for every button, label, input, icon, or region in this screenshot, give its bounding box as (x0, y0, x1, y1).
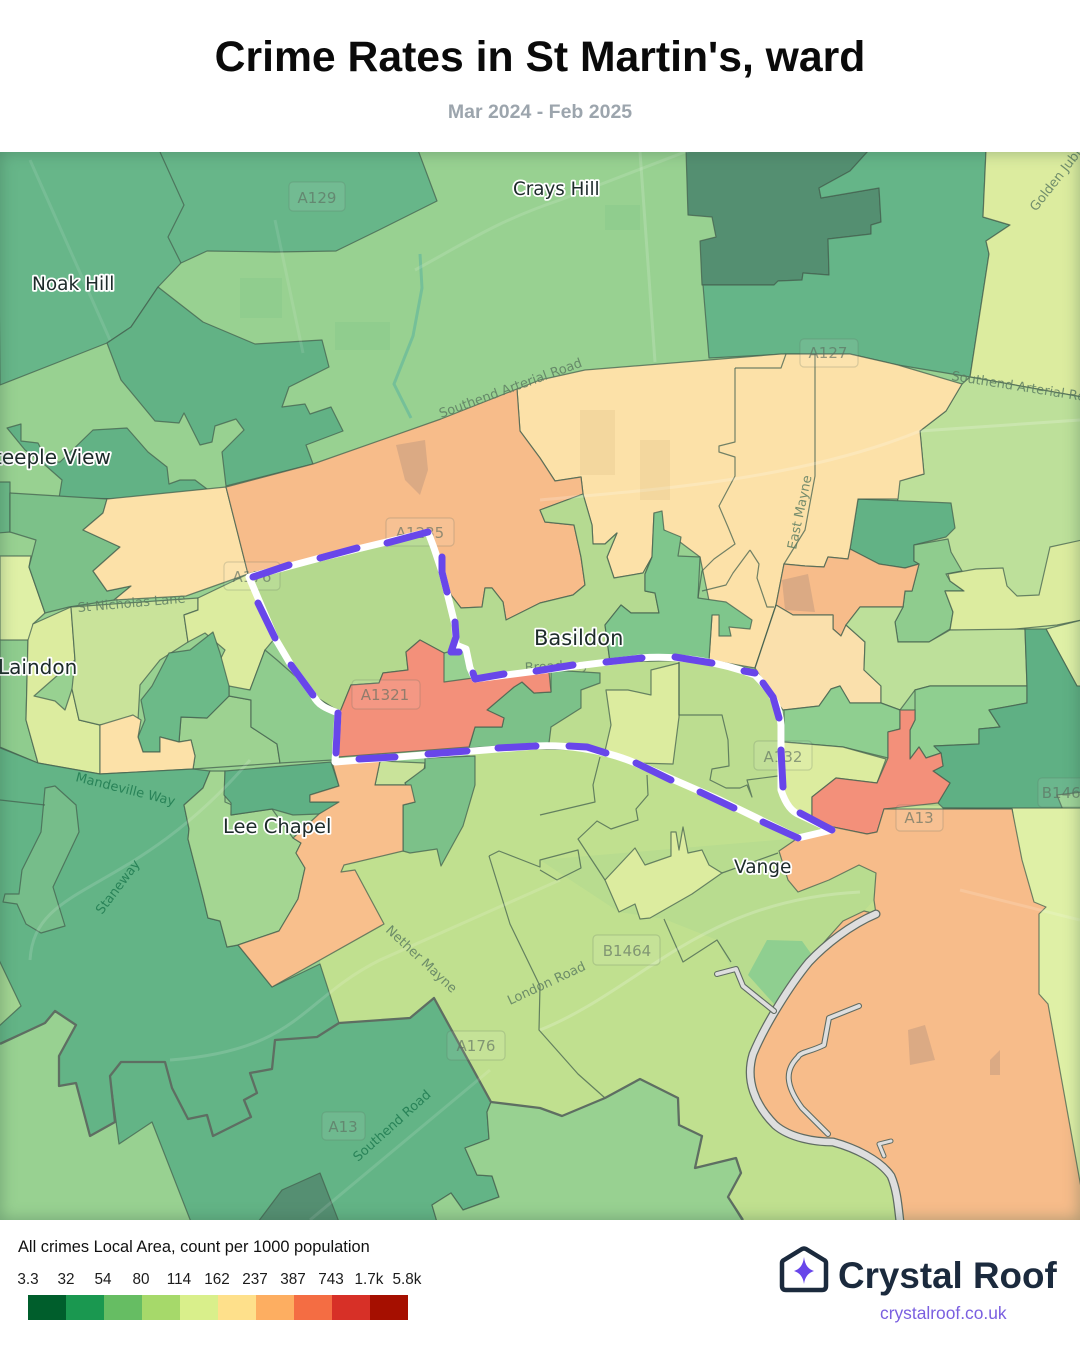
place names (0, 179, 791, 878)
legend value labels: 80 (132, 1271, 150, 1288)
road names: Southend Road (351, 1088, 434, 1165)
road number badges: A1235 (396, 524, 444, 542)
road names: Broadway (524, 658, 590, 676)
road names: Staneway (93, 857, 144, 917)
place names: Crays Hill (513, 179, 600, 200)
legend colour scale (28, 1295, 408, 1320)
road number badges: A132 (764, 748, 802, 766)
legend value labels: 237 (242, 1271, 268, 1288)
road number badges: A1321 (361, 686, 409, 704)
ward shapes: north (0, 150, 1080, 642)
ward shapes: south west (0, 745, 1000, 1222)
road names (74, 131, 1080, 1165)
legend value labels: 743 (318, 1271, 344, 1288)
legend value labels: 3.3 (17, 1271, 39, 1288)
road number badges: B1464 (603, 942, 651, 960)
road number badges: A176 (457, 1037, 495, 1055)
legend value labels: 162 (204, 1271, 230, 1288)
legend value labels: 54 (94, 1271, 112, 1288)
choropleth map (0, 152, 1080, 1220)
legend value labels (17, 1271, 422, 1288)
road names: St Nicholas Lane (77, 592, 186, 616)
internal ward boundaries (0, 152, 815, 1098)
road names: London Road (505, 959, 588, 1009)
road number badges: A13 (328, 1118, 358, 1136)
river estuary channels (717, 914, 900, 1222)
place names: Noak Hill (32, 274, 114, 295)
place names: Laindon (0, 655, 77, 679)
legend value labels: 32 (57, 1271, 74, 1288)
ward boundary: white casing (249, 532, 832, 838)
place names: Basildon (534, 626, 623, 650)
road names: Mandeville Way (74, 770, 177, 810)
road names: Nether Mayne (382, 923, 460, 996)
ward boundary: purple dashes (253, 532, 832, 838)
road number badges: A13 (904, 809, 934, 827)
road number badges (224, 182, 1080, 1140)
ward shapes: centre and east (226, 354, 1080, 1222)
legend value labels: 1.7k (355, 1271, 383, 1288)
road number badges: A176 (233, 568, 271, 586)
place names: Lee Chapel (223, 815, 331, 838)
title: Crime Rates in St Martin's, ward (215, 33, 865, 81)
brand name: Crystal Roof (838, 1255, 1057, 1296)
road number badges: A127 (809, 344, 847, 362)
date range subtitle: Mar 2024 - Feb 2025 (448, 101, 632, 123)
road names: Southend Arterial Road (437, 356, 584, 422)
thick district boundary (0, 998, 743, 1220)
road names: East Mayne (785, 474, 816, 551)
legend value labels: 387 (280, 1271, 306, 1288)
map base: mid green area (0, 152, 1080, 1220)
legend title: All crimes Local Area, count per 1000 population (18, 1238, 370, 1256)
legend value labels: 5.8k (393, 1271, 421, 1288)
built-up and industrial patches (396, 440, 1000, 1075)
brand url: crystalroof.co.uk (880, 1303, 1007, 1323)
legend value labels: 114 (167, 1271, 191, 1288)
icon: crystal roof house logo (780, 1246, 828, 1292)
ward shapes: west (0, 482, 337, 774)
place names: Vange (734, 857, 791, 878)
road number badges: A129 (298, 189, 336, 207)
block texture (240, 205, 670, 500)
faint street and stream texture (30, 150, 1080, 1220)
